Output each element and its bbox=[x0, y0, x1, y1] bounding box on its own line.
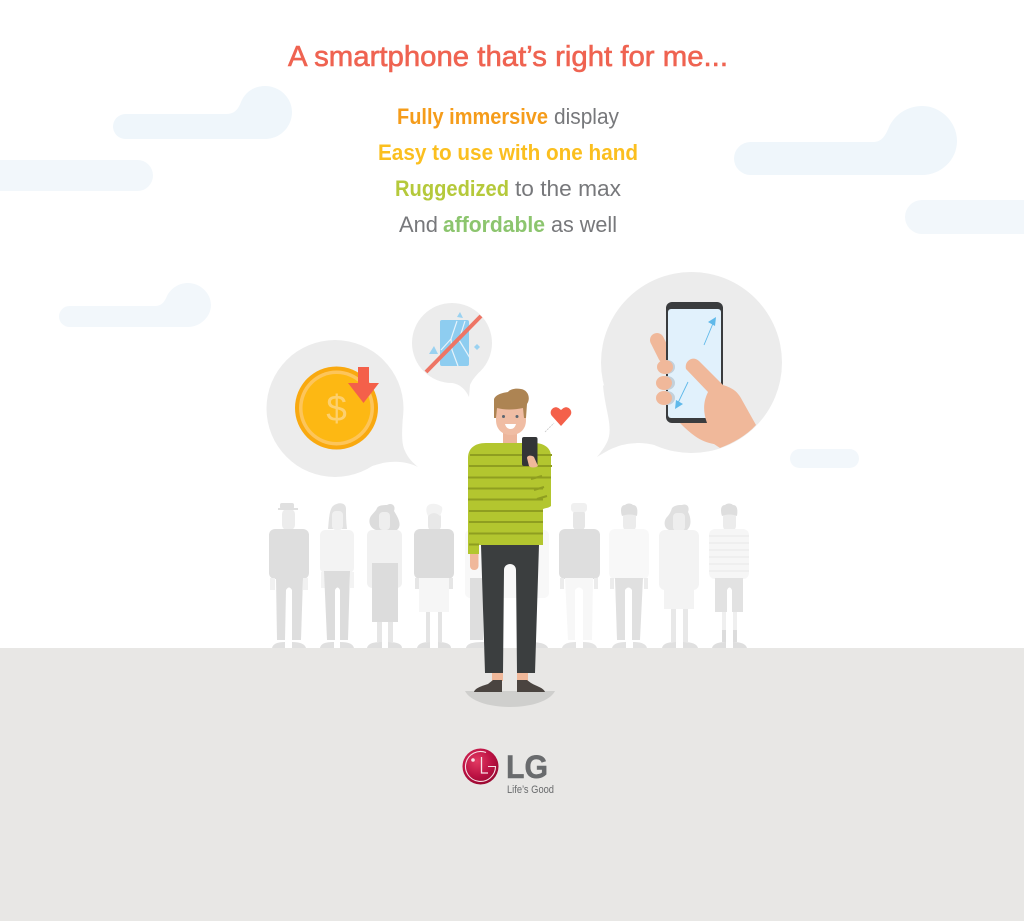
icon: dollar coin bbox=[295, 366, 378, 450]
icon: hand holding phone bbox=[656, 302, 756, 448]
crowd of people bbox=[269, 503, 749, 648]
floor bbox=[0, 648, 1024, 921]
person 1: hat bbox=[269, 503, 309, 648]
text line: and affordable as well: as well bbox=[551, 212, 617, 237]
neck bbox=[503, 430, 517, 446]
logo emblem bbox=[462, 748, 498, 784]
trousers bbox=[481, 545, 539, 673]
shoes bbox=[474, 680, 545, 692]
cloud: small right bbox=[790, 449, 859, 468]
person 9: striped sweater bbox=[709, 504, 749, 648]
hair bbox=[494, 389, 529, 418]
person 3: skirt bbox=[367, 504, 402, 648]
ankles bbox=[492, 673, 528, 681]
icon: cracked phone bbox=[429, 312, 480, 366]
text line: fully immersive display: display bbox=[554, 104, 620, 129]
person 5: behind main figure bbox=[465, 530, 549, 648]
speech bubble: rugged phone bbox=[412, 303, 492, 397]
icon: heart bbox=[551, 407, 571, 426]
main figure bbox=[465, 389, 571, 707]
person 4: shorts bbox=[414, 504, 454, 648]
person 7: light sweater bbox=[609, 504, 649, 648]
text line: easy to use with one hand: Easy to use with one hand bbox=[378, 140, 638, 165]
icon: down arrow bbox=[348, 367, 379, 403]
text line: ruggedized to the max: Ruggedized bbox=[395, 176, 509, 201]
left hand bbox=[470, 548, 478, 570]
icon: dollar coin: $ bbox=[326, 388, 347, 429]
tagline: Life’s Good bbox=[507, 784, 554, 796]
cloud: upper left bbox=[113, 86, 292, 139]
logo wordmark: LG bbox=[506, 749, 548, 785]
text line: ruggedized to the max: to the max bbox=[515, 176, 622, 201]
cloud: upper right bbox=[734, 106, 957, 175]
text line: and affordable as well: And bbox=[399, 212, 438, 237]
person 6: hat light bbox=[559, 503, 600, 648]
face bbox=[496, 408, 526, 435]
cloud: far left bbox=[0, 160, 153, 191]
eyes and smile bbox=[502, 415, 518, 429]
text line: and affordable as well: affordable bbox=[443, 212, 545, 237]
title: A smartphone that’s right for me... bbox=[288, 41, 728, 73]
person 8: dress bbox=[659, 504, 699, 648]
speech bubble: one hand use bbox=[597, 272, 782, 457]
phone bbox=[522, 437, 538, 466]
text line: fully immersive display: Fully immersive bbox=[397, 104, 548, 129]
icon: prohibition slash bbox=[426, 316, 481, 372]
dashed connector bbox=[545, 423, 554, 432]
LG logo bbox=[462, 748, 554, 796]
ground shadow bbox=[465, 691, 555, 707]
speech bubble: price bbox=[266, 340, 418, 477]
text line: ruggedized to the max bbox=[395, 176, 622, 201]
cloud: far right bbox=[905, 200, 1024, 234]
right hand bbox=[527, 456, 538, 468]
person 2: long hair bbox=[320, 503, 354, 648]
cloud: middle left bbox=[59, 283, 211, 327]
text line: and affordable as well bbox=[399, 212, 617, 237]
striped sweater bbox=[468, 443, 552, 554]
